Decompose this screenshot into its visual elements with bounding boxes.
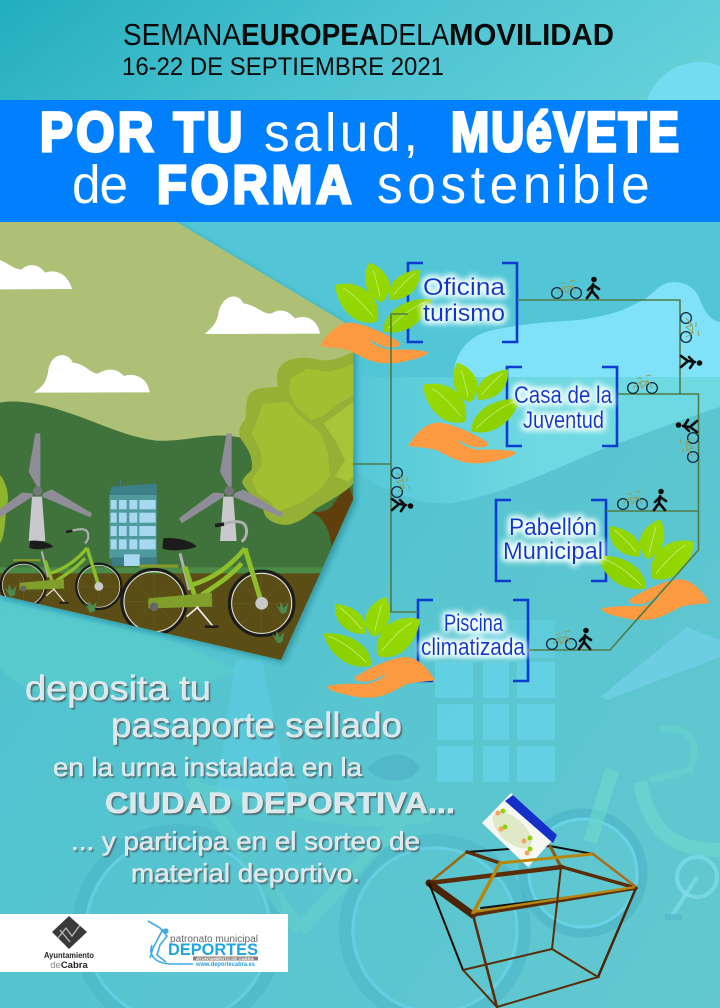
ballot box with passport	[429, 793, 636, 1007]
call to action text: material deportivo.	[131, 858, 360, 888]
call to action text: pasaporte sellado	[111, 706, 402, 745]
slogan banner: POR TU	[40, 101, 242, 164]
slogan banner: de	[72, 155, 128, 215]
plant in hand: Oficina turismo	[320, 263, 432, 363]
title block	[122, 17, 614, 81]
plant in hand: Pabellón Municipal	[598, 519, 709, 620]
route line	[353, 300, 698, 650]
logo: Ayuntamiento de Cabra: deCabra	[50, 960, 88, 971]
call to action text: deposita tu	[25, 669, 211, 708]
slogan banner: MUéVETE	[451, 101, 679, 163]
location labels: turismo	[423, 300, 505, 327]
logo: Ayuntamiento de Cabra: Ayuntamiento	[44, 950, 94, 960]
passport card	[482, 793, 557, 867]
location labels: Oficina	[423, 274, 506, 301]
call to action text: ... y participa en el sorteo de	[71, 826, 420, 856]
slogan banner: sostenible	[377, 155, 650, 215]
location labels	[421, 274, 613, 661]
route icons: bicycles and walkers	[392, 277, 702, 649]
call to action text: CIUDAD DEPORTIVA...	[105, 787, 455, 820]
logo: Patronato Municipal de Deportes: AYUNTAMIENTO DE CABRA	[196, 957, 254, 961]
location labels: Juventud	[523, 407, 604, 434]
plant in hand: Piscina climatizada	[323, 597, 435, 698]
call to action text	[25, 669, 455, 888]
ghost building	[435, 620, 555, 782]
location labels: Municipal	[503, 538, 603, 565]
title block: SEMANA	[123, 17, 241, 52]
title block: EUROPEA	[241, 17, 379, 52]
ghost bicycles	[78, 729, 720, 1008]
title block: DELA	[379, 17, 449, 52]
location labels: Pabellón	[509, 514, 597, 541]
location labels: Piscina	[444, 610, 503, 637]
logo strip	[0, 914, 288, 972]
call to action text: en la urna instalada en la	[53, 752, 363, 782]
slogan banner	[0, 100, 720, 222]
logo: Patronato Municipal de Deportes: patronato municipal	[170, 934, 258, 945]
slogan banner: salud,	[264, 103, 418, 163]
logo: Patronato Municipal de Deportes	[148, 921, 258, 968]
title block: 16-22 DE SEPTIEMBRE 2021	[122, 53, 444, 81]
illustration panel: landscape with bicycles	[0, 220, 353, 687]
logo: Patronato Municipal de Deportes: DEPORTES	[168, 940, 258, 959]
location brackets	[408, 263, 617, 681]
title block: MOVILIDAD	[449, 17, 614, 52]
plant in hand: Casa de la Juventud	[408, 363, 520, 463]
logo: Ayuntamiento de Cabra	[44, 916, 94, 971]
location labels: Casa de la	[514, 382, 613, 409]
slogan banner: FORMA	[157, 154, 351, 215]
location labels: climatizada	[421, 634, 526, 661]
logo: Patronato Municipal de Deportes: www.deportecabra.es	[195, 962, 256, 968]
